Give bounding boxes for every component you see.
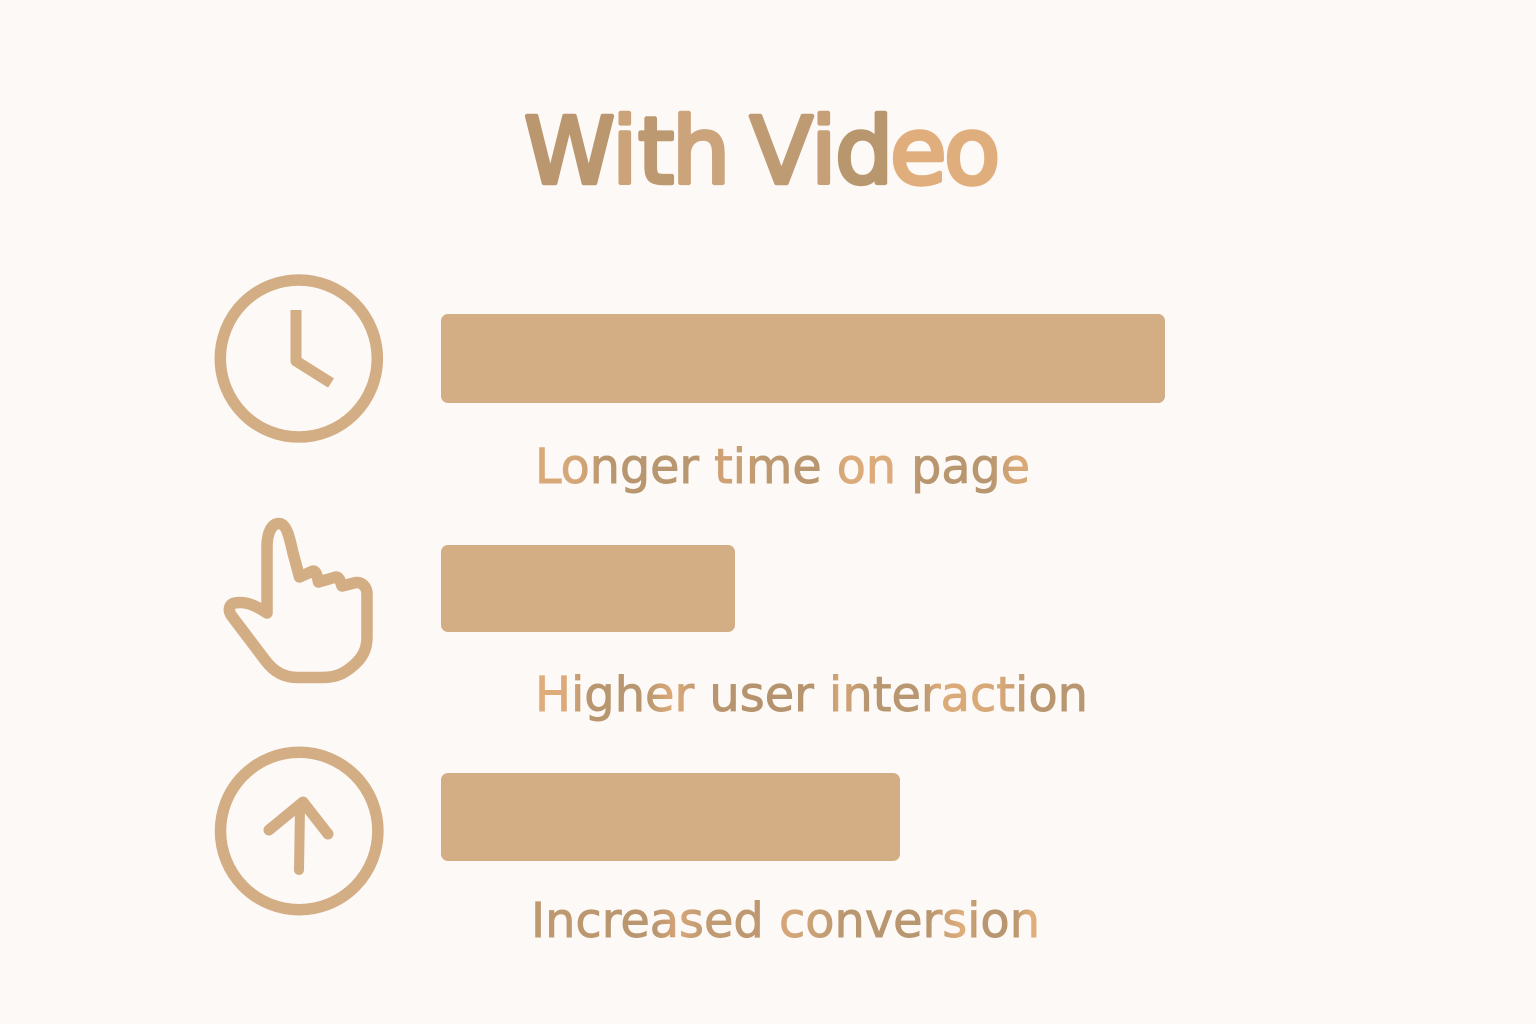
bar: user interaction (441, 545, 735, 632)
label: conversion: Increased conversion (531, 893, 1040, 949)
icon: clock (220, 280, 377, 437)
bar: time on page (441, 314, 1165, 403)
title: W (524, 98, 615, 205)
title: i (612, 98, 638, 205)
label: user interaction: Higher user interaction (535, 667, 1088, 723)
icon: pointing hand (229, 524, 367, 678)
title: i (811, 98, 837, 205)
row: increased conversion (221, 752, 1040, 949)
bar: conversion (441, 773, 900, 861)
label: time on page: Longer time on page (535, 439, 1030, 495)
title: V (750, 98, 813, 205)
title: e (890, 98, 947, 205)
title: h (672, 98, 760, 205)
title: t (638, 98, 674, 205)
row: longer time on page (220, 280, 1165, 495)
icon: up arrow in circle (221, 752, 378, 910)
title: o (944, 98, 1000, 205)
title: d (835, 98, 893, 205)
row: higher user interaction (229, 524, 1088, 723)
